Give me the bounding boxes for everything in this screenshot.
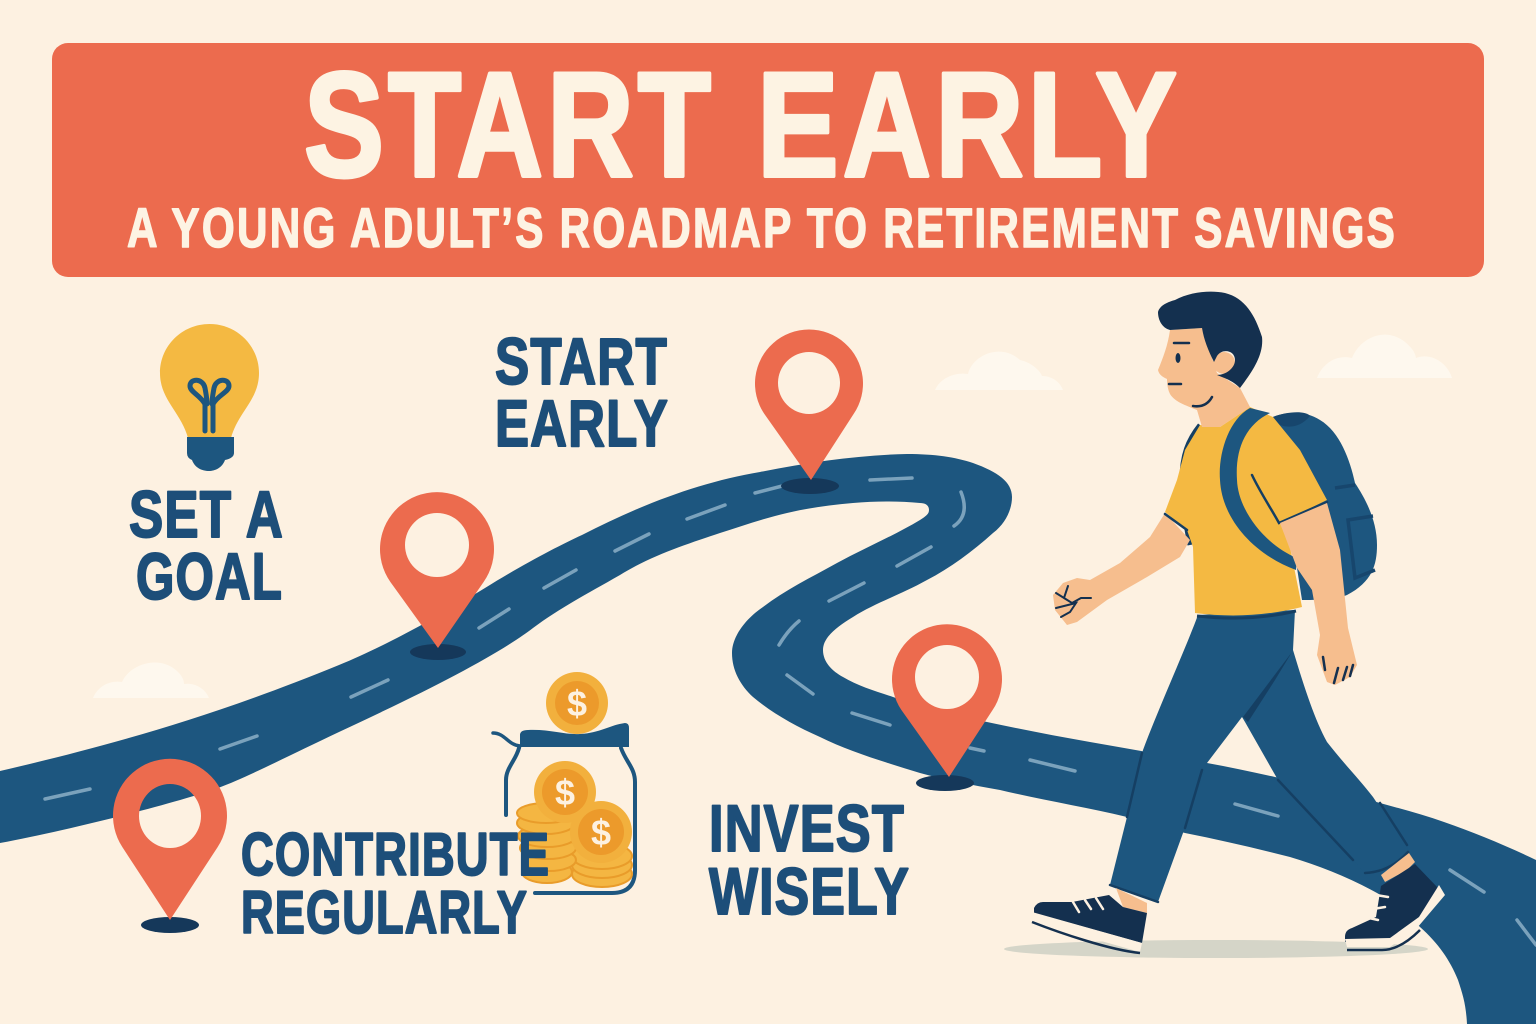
label: set a goal bbox=[129, 477, 284, 613]
left back strap bbox=[1182, 425, 1200, 545]
map pin: set a goal marker bbox=[380, 492, 494, 660]
clouds bbox=[93, 335, 1452, 698]
right ankle and shoe bbox=[1345, 853, 1445, 950]
near arm bbox=[1280, 503, 1357, 685]
map pin: contribute regularly marker bbox=[113, 759, 227, 933]
icon: coin jar bbox=[493, 672, 635, 893]
backpack shoulder strap bbox=[1220, 408, 1297, 570]
label: contribute regularly bbox=[241, 821, 550, 946]
map pin: invest wisely marker bbox=[892, 624, 1002, 791]
coin: $ bbox=[591, 812, 611, 853]
label: invest wisely bbox=[709, 791, 910, 928]
label: invest wisely: WISELY bbox=[709, 854, 910, 928]
label: set a goal: GOAL bbox=[136, 539, 283, 613]
backpack bbox=[1273, 412, 1377, 600]
jar lid and string bbox=[520, 723, 629, 747]
icon: light bulb bbox=[160, 324, 259, 471]
coin: $ bbox=[555, 772, 575, 813]
coin bbox=[570, 801, 632, 863]
map pin: start early marker bbox=[755, 330, 863, 494]
title bbox=[304, 41, 1181, 208]
walking young man with backpack bbox=[1032, 292, 1445, 953]
winding road bbox=[0, 454, 1536, 1024]
falling coin bbox=[546, 672, 608, 734]
label: set a goal: SET A bbox=[129, 477, 284, 551]
title: START bbox=[304, 41, 715, 208]
label: start early: EARLY bbox=[495, 386, 669, 460]
shirt details bbox=[1165, 475, 1327, 530]
label: start early bbox=[495, 324, 669, 460]
left ankle and shoe bbox=[1032, 888, 1147, 953]
label: start early: START bbox=[495, 324, 668, 398]
coin stacks bbox=[517, 803, 632, 887]
yellow t-shirt bbox=[1165, 407, 1327, 615]
falling coin: $ bbox=[567, 683, 587, 724]
ground shadow bbox=[1004, 940, 1428, 958]
title: EARLY bbox=[757, 41, 1181, 208]
coin bbox=[534, 761, 596, 823]
label: invest wisely: INVEST bbox=[709, 791, 905, 865]
label: contribute regularly: CONTRIBUTE bbox=[241, 821, 550, 888]
header banner bbox=[52, 41, 1484, 277]
head and neck bbox=[1158, 292, 1262, 427]
trousers bbox=[1110, 610, 1408, 902]
far arm and fist bbox=[1053, 513, 1190, 625]
label: contribute regularly: REGULARLY bbox=[241, 879, 528, 946]
jar outline bbox=[506, 748, 635, 893]
